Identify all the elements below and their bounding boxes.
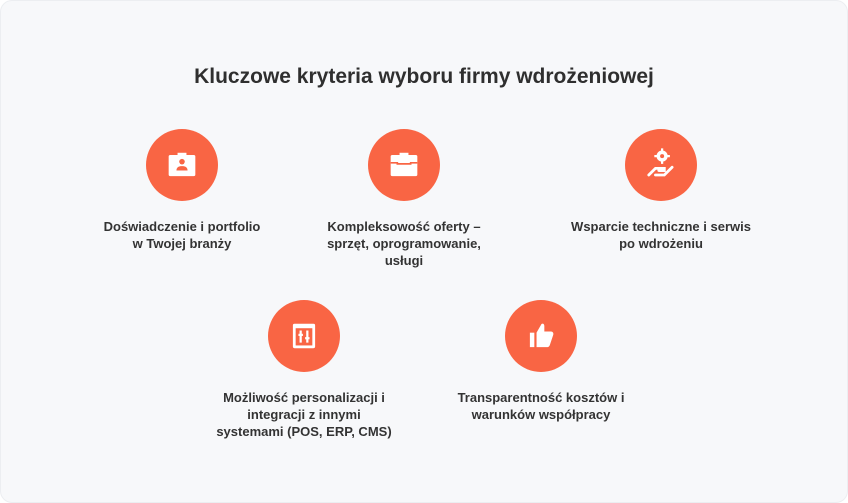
text: Transparentność kosztów i	[458, 390, 624, 405]
text: w Twojej branży	[133, 236, 231, 251]
text	[104, 219, 260, 251]
text	[571, 219, 751, 251]
icon: sliders	[268, 300, 340, 372]
item: support	[571, 129, 751, 251]
text	[327, 219, 481, 268]
icon: hand gear	[625, 129, 697, 201]
text	[458, 390, 624, 422]
text: Doświadczenie i portfolio	[104, 219, 260, 234]
text: po wdrożeniu	[619, 236, 703, 251]
text: systemami (POS, ERP, CMS)	[216, 424, 392, 439]
icon: toolbox	[368, 129, 440, 201]
item: transparency	[458, 300, 624, 422]
item: offer	[327, 129, 481, 268]
item: experience	[104, 129, 260, 251]
text: usługi	[385, 253, 423, 268]
text: Wsparcie techniczne i serwis	[571, 219, 751, 234]
title: Kluczowe kryteria wyboru firmy wdrożeniowej	[194, 65, 654, 88]
icon: thumbs up	[505, 300, 577, 372]
item: personalization	[216, 300, 392, 439]
text	[216, 390, 392, 439]
text: Kompleksowość oferty –	[327, 219, 481, 234]
text: sprzęt, oprogramowanie,	[327, 236, 481, 251]
text: warunków współpracy	[472, 407, 610, 422]
text: Możliwość personalizacji i	[223, 390, 385, 405]
icon: badge	[146, 129, 218, 201]
text: integracji z innymi	[247, 407, 361, 422]
